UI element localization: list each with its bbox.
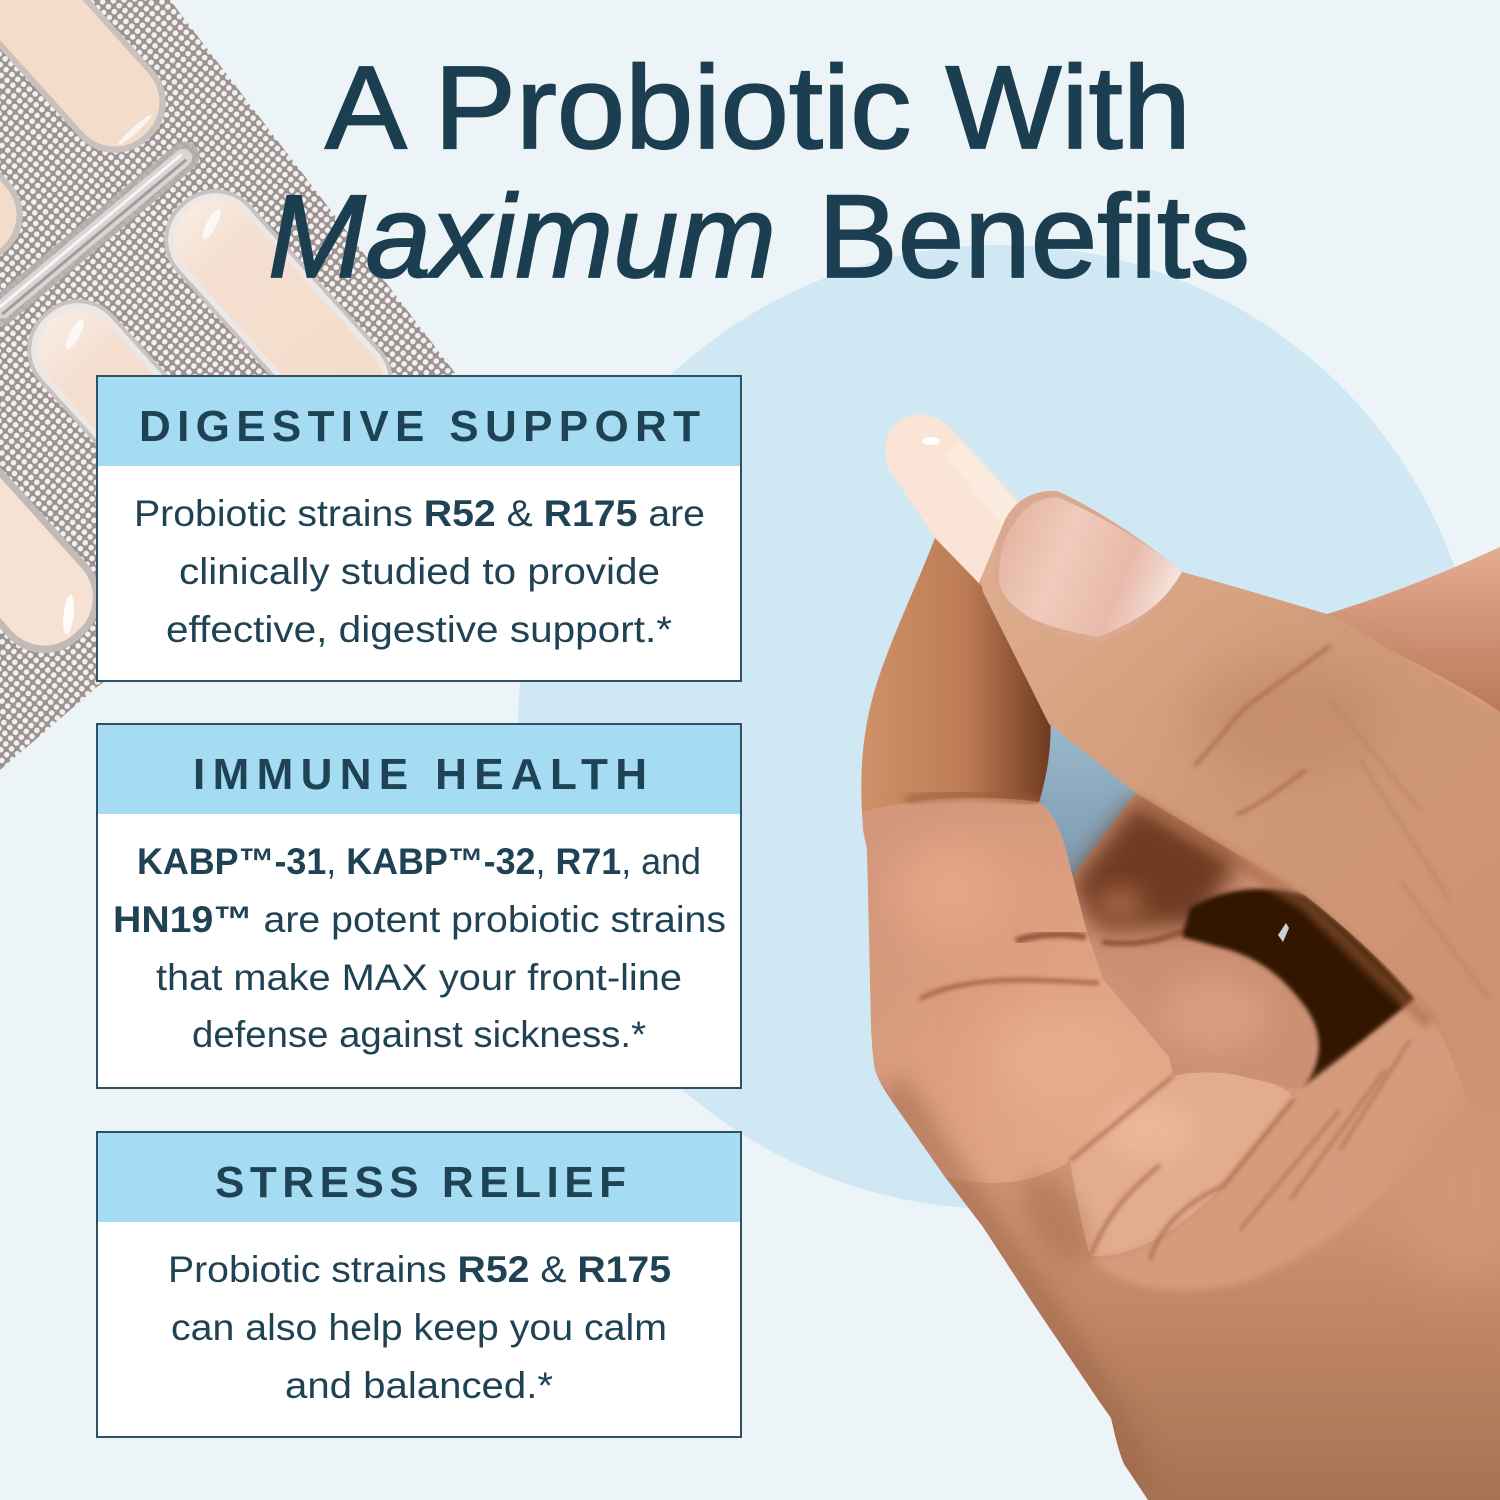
photo: capsule held between fingers	[885, 415, 1018, 585]
heading bar: stress relief: STRESS RELIEF	[215, 1158, 626, 1207]
heading bar: digestive support: DIGESTIVE SUPPORT	[139, 402, 700, 451]
thumb pad	[1070, 1072, 1294, 1256]
text block: digestive support	[134, 493, 705, 650]
palm interior	[1072, 793, 1318, 1088]
text block: stress relief	[168, 1249, 671, 1406]
text block: stress relief: and balanced.*	[285, 1365, 553, 1406]
text block: immune health	[113, 841, 726, 1055]
heading bar: immune health: IMMUNE HEALTH	[193, 750, 647, 799]
shading	[1461, 1243, 1474, 1244]
panel: stress relief	[97, 1132, 741, 1437]
thumb	[982, 530, 1500, 1078]
text block: stress relief: Probiotic strains R52 & R175	[168, 1249, 671, 1290]
panel: immune health	[97, 724, 741, 1088]
heading bar: immune health	[98, 725, 740, 814]
front finger and palm edge	[863, 798, 1173, 1183]
panel: digestive support	[97, 376, 741, 681]
hand silhouette	[861, 491, 1500, 1500]
photo: blister pack of capsules	[0, 0, 455, 770]
text block: digestive support: clinically studied to provide	[179, 551, 660, 592]
thumbnail	[994, 491, 1182, 642]
index fingertip	[861, 538, 1051, 815]
gap between fingers	[1039, 724, 1136, 877]
title line 2	[268, 171, 1250, 303]
text block: digestive support: Probiotic strains R52 & R175 are	[134, 493, 705, 534]
back finger	[1327, 547, 1500, 712]
text block: immune health: HN19™ are potent probiotic strains	[113, 899, 726, 940]
text block: stress relief: can also help keep you calm	[171, 1307, 667, 1348]
title line 2: Maximum	[268, 171, 776, 303]
title line 1: A Probiotic With	[325, 42, 1191, 174]
text block: immune health: defense against sickness.*	[192, 1014, 646, 1055]
text block: digestive support: effective, digestive support.*	[166, 609, 672, 650]
dark shadow	[1182, 889, 1414, 1090]
text block: immune health: KABP™-31, KABP™-32, R71, and	[137, 841, 701, 882]
heading bar: digestive support	[98, 377, 740, 466]
title line 2: Benefits	[818, 171, 1250, 303]
background circle	[518, 245, 1482, 1209]
photo: hand	[861, 491, 1500, 1500]
heading bar: stress relief	[98, 1133, 740, 1222]
flank of palm	[1096, 1038, 1384, 1291]
text block: immune health: that make MAX your front-line	[156, 957, 682, 998]
title	[268, 42, 1250, 303]
creases	[905, 794, 1039, 802]
